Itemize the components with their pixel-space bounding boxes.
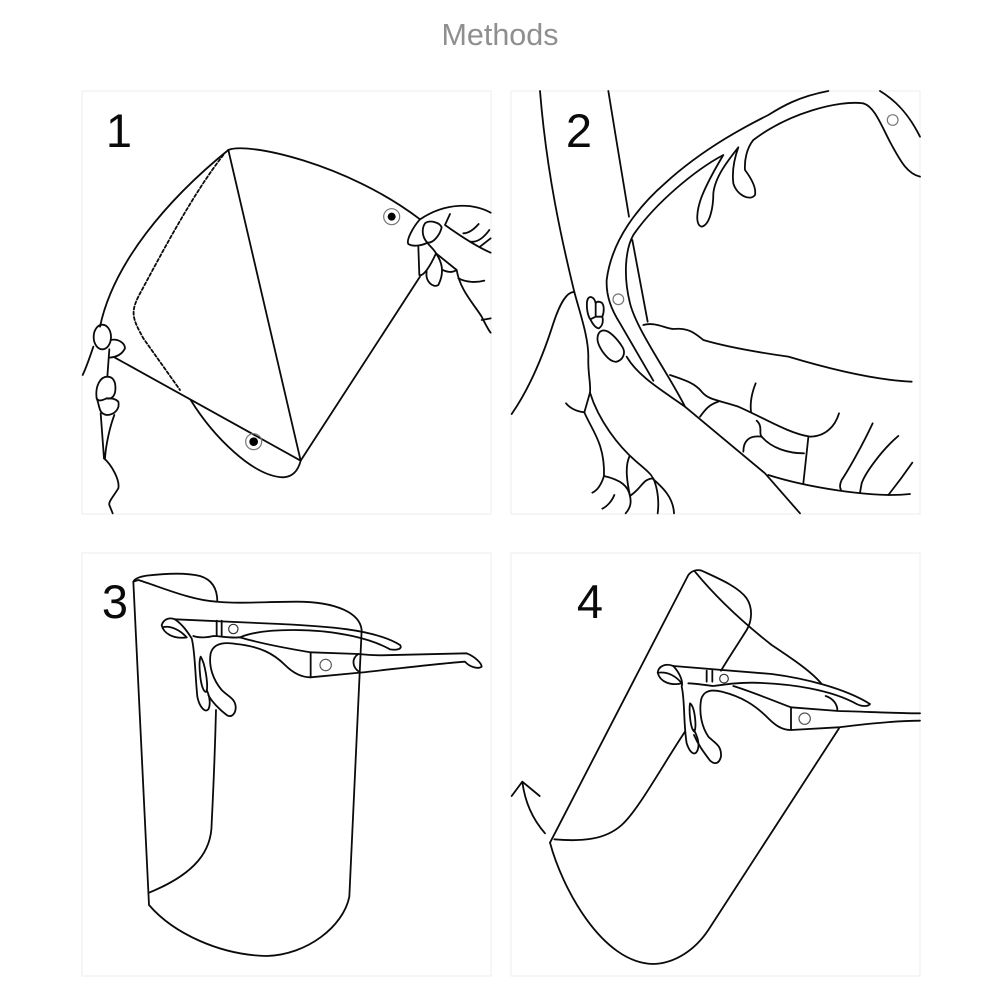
illustration: unfolded shield held by two hands (83, 148, 491, 513)
panel: step 2 (511, 91, 920, 514)
illustration: hands attaching shield to frame (512, 91, 920, 513)
panel: step 3 (82, 553, 491, 976)
illustration: shield tilted upward on frame (512, 570, 920, 964)
step number 3: 3 (102, 575, 128, 628)
panel: step 4 (511, 553, 920, 976)
step number 1: 1 (106, 104, 132, 157)
illustration: shield assembled on glasses frame, side view (133, 574, 482, 956)
panel: step 1 (82, 91, 491, 514)
title: Methods (442, 18, 558, 52)
arrow: lift direction (512, 782, 545, 833)
step number 4: 4 (577, 575, 603, 628)
step number 2: 2 (566, 104, 592, 157)
